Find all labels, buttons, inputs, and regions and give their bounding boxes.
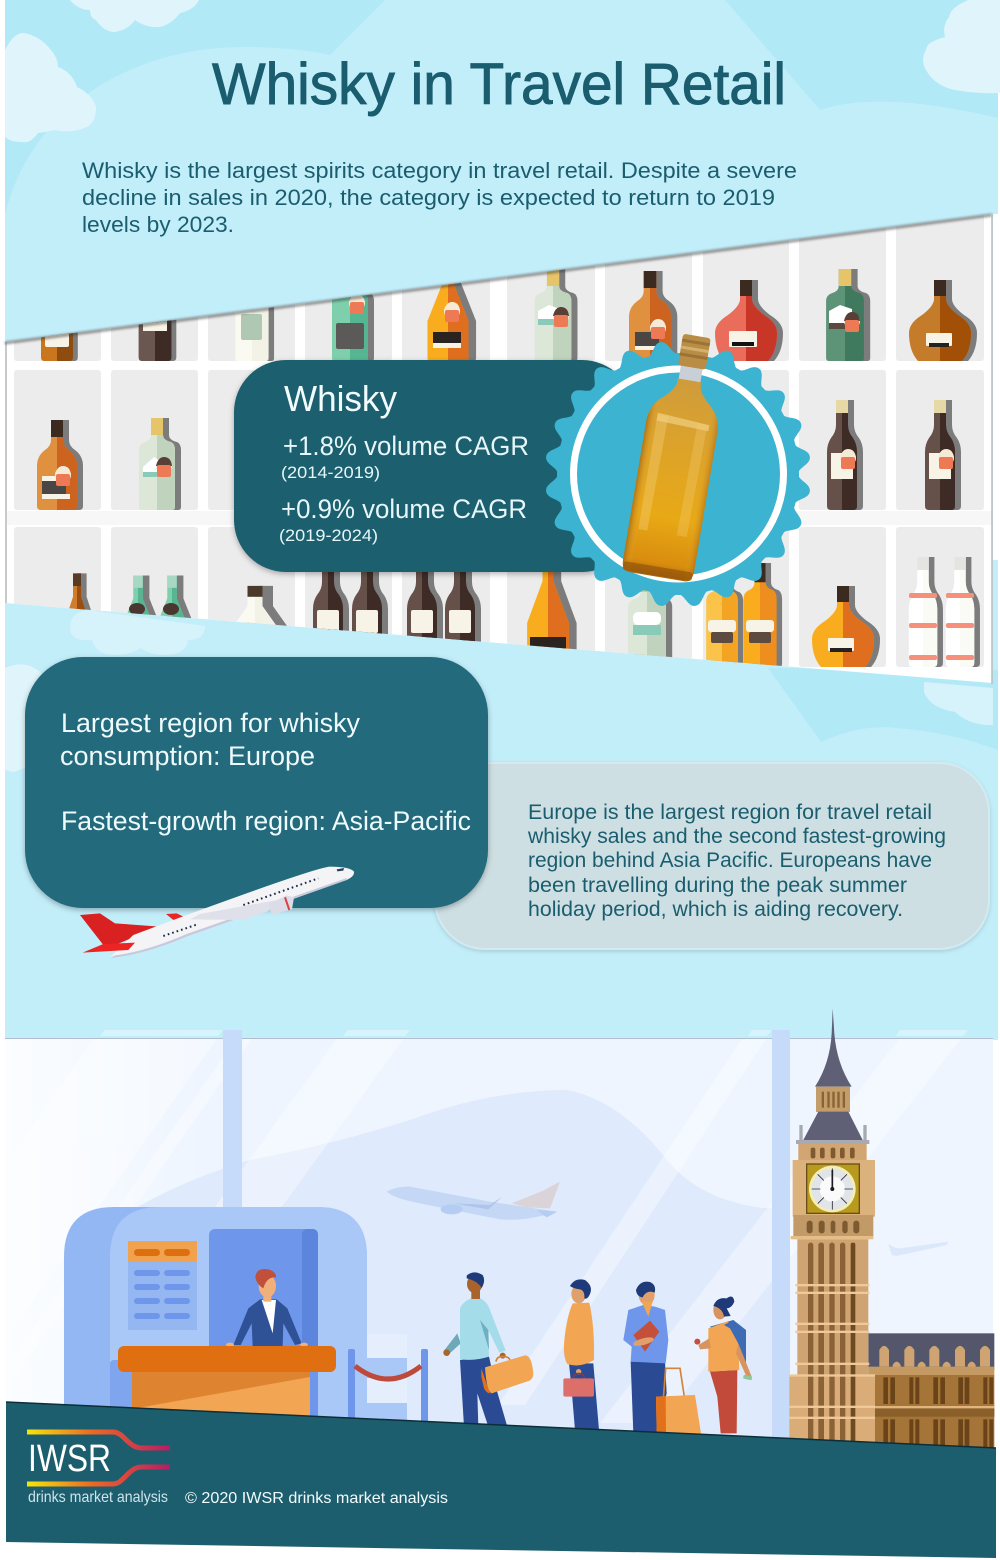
window columns bbox=[223, 1030, 790, 1445]
icon: traveller with blue jumper bbox=[443, 1272, 533, 1427]
icon: cloud left bbox=[5, 33, 96, 142]
panel: region callout grey bbox=[435, 763, 989, 949]
stat: 2019-2024 CAGR bbox=[279, 494, 527, 545]
icon: airliner in distance bbox=[387, 1182, 560, 1220]
light streaks bbox=[215, 1143, 772, 1423]
panel: check-in desk bbox=[64, 1207, 367, 1420]
icon: traveller with backpack bbox=[694, 1296, 752, 1433]
copyright text: © 2020 IWSR drinks market analysis bbox=[185, 1490, 448, 1507]
icon: cloud behind region box bbox=[5, 664, 48, 772]
panel: region facts box bbox=[25, 657, 488, 908]
desk bbox=[110, 1360, 134, 1420]
clock tower bbox=[789, 1008, 875, 1450]
text: fastest growth region: Fastest-growth region: Asia-Pacific bbox=[61, 806, 471, 836]
footer top shadow bbox=[6, 1402, 996, 1448]
stat: 2014-2019 CAGR: (2014-2019) bbox=[281, 463, 380, 482]
text block: europe commentary bbox=[527, 801, 946, 921]
text block: europe commentary: Europe is the largest region for travel retail bbox=[528, 801, 932, 824]
window bbox=[209, 1229, 318, 1354]
whisky bottle bbox=[621, 330, 733, 583]
icon: red-tailed airplane bbox=[80, 867, 354, 958]
logo: IWSR: IWSR bbox=[28, 1438, 111, 1480]
icon: Big Ben and Parliament bbox=[789, 1008, 994, 1450]
starburst seal bbox=[544, 340, 812, 608]
intro text block bbox=[82, 158, 797, 237]
panel: airport scene bbox=[5, 1030, 993, 1458]
panel: sky background bbox=[5, 0, 998, 1040]
text: largest region: Largest region for whisky bbox=[61, 708, 360, 738]
flight board bbox=[128, 1241, 197, 1330]
icon: cloud top left bbox=[70, 0, 199, 32]
panel: footer band bbox=[6, 1402, 996, 1558]
stat: 2019-2024 CAGR: (2019-2024) bbox=[279, 526, 378, 545]
intro text block: decline in sales in 2020, the category is expected to return to 2019 bbox=[82, 185, 775, 210]
icon: cloud right under shelves bbox=[924, 682, 993, 725]
text block: europe commentary: region behind Asia Pacific. Europeans have bbox=[528, 849, 932, 872]
stat: 2014-2019 CAGR: +1.8% volume CAGR bbox=[283, 431, 529, 461]
text block: europe commentary: holiday period, which is aiding recovery. bbox=[528, 898, 903, 921]
bottles: top shelf bbox=[41, 269, 977, 361]
title: Whisky in Travel Retail bbox=[212, 52, 786, 117]
heading: whisky: Whisky bbox=[284, 378, 397, 419]
icon: queue barrier bbox=[348, 1334, 428, 1425]
panel: bottle shelves bbox=[5, 190, 993, 690]
shelf cells bbox=[14, 190, 984, 667]
icon: traveller with orange jumper bbox=[563, 1279, 599, 1430]
agent bbox=[226, 1269, 308, 1347]
hills through window bbox=[138, 1090, 772, 1437]
intro text block: Whisky is the largest spirits category in travel retail. Despite a severe bbox=[82, 158, 797, 183]
icon: cloud under shelves bbox=[70, 610, 205, 655]
left window glow bbox=[5, 1039, 80, 1410]
bottles: middle shelf bbox=[37, 400, 961, 510]
icon: whisky bottle badge bbox=[544, 330, 812, 608]
bottles: bottom shelf bbox=[62, 553, 980, 667]
light streaks above window frame bbox=[100, 1030, 968, 1036]
logo: IWSR: drinks market analysis bbox=[28, 1489, 168, 1506]
icon: far airliner bbox=[888, 1242, 948, 1256]
shelf top edge shadow bbox=[5, 214, 992, 684]
intro text block: levels by 2023. bbox=[82, 212, 234, 237]
text: largest region: consumption: Europe bbox=[60, 741, 315, 771]
text: largest region bbox=[60, 708, 360, 771]
text block: europe commentary: been travelling during the peak summer bbox=[528, 874, 907, 897]
icon: traveller with suitcase and folder bbox=[623, 1282, 701, 1433]
stat: 2019-2024 CAGR: +0.9% volume CAGR bbox=[281, 494, 527, 524]
text block: europe commentary: whisky sales and the second fastest-growing bbox=[527, 825, 946, 848]
panel: whisky stats box bbox=[234, 360, 634, 572]
panel: right margin strip bbox=[993, 214, 1000, 560]
stat: 2014-2019 CAGR bbox=[281, 431, 529, 482]
icon: cloud right bbox=[923, 0, 1000, 93]
logo: IWSR bbox=[27, 1432, 170, 1506]
white ring bbox=[574, 369, 784, 579]
parliament bbox=[868, 1333, 994, 1450]
